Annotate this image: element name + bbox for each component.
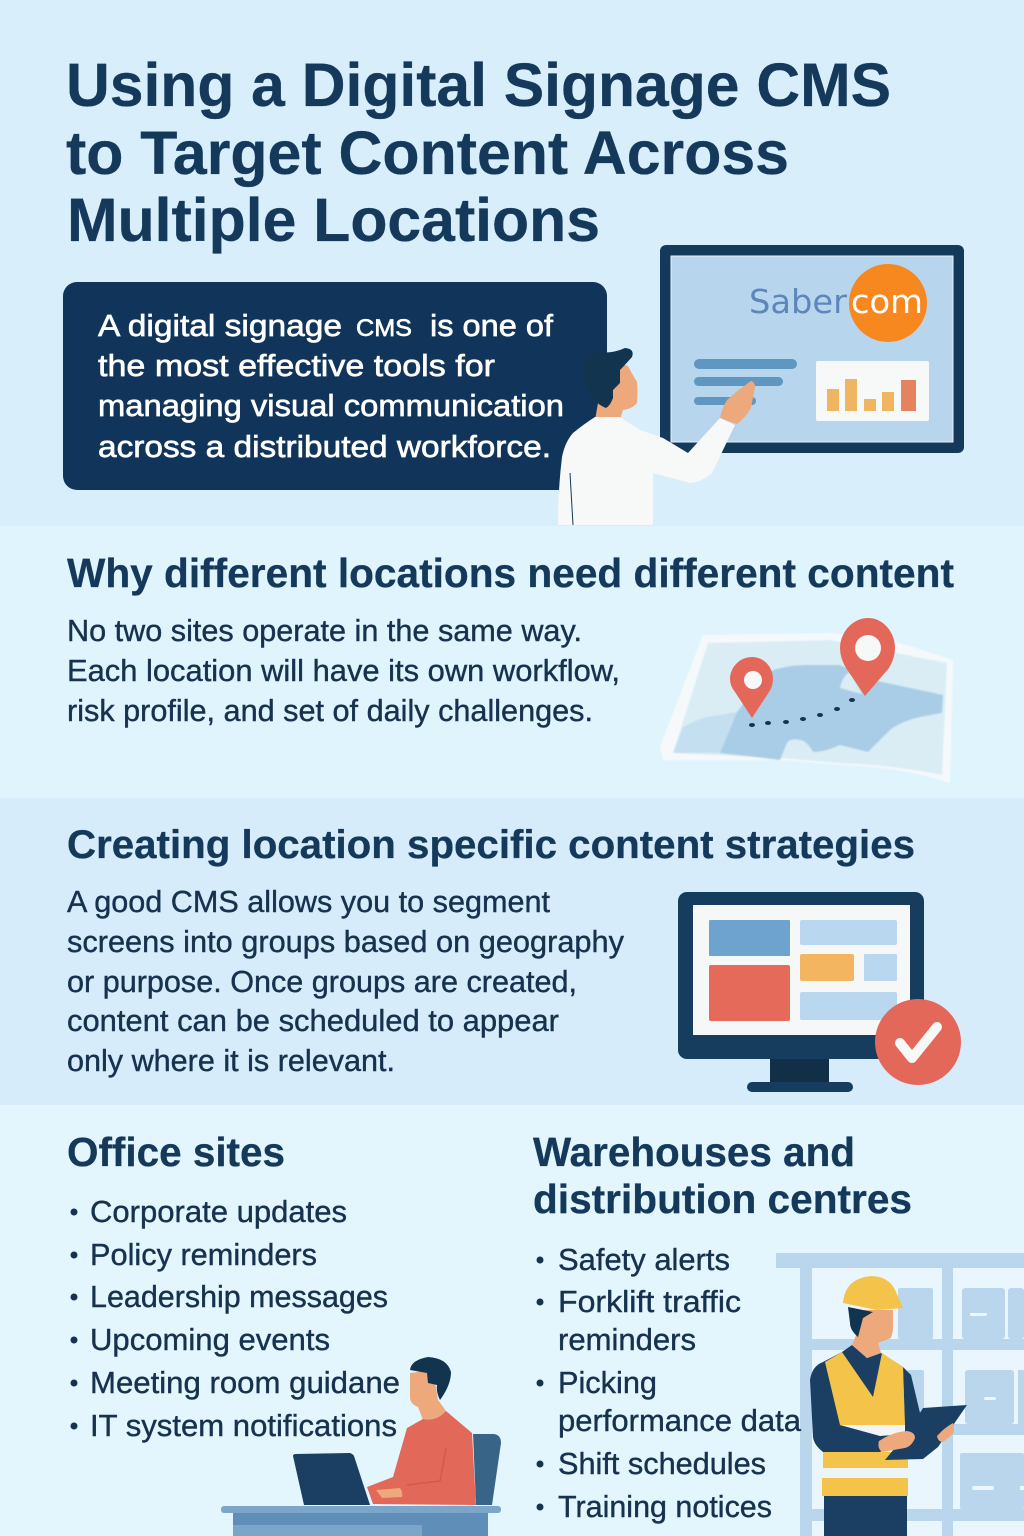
list: office sites: Leadership messages [90,1279,388,1314]
list: warehouses: reminders [558,1322,696,1357]
list: warehouses: Training notices [558,1489,772,1524]
list: office sites: Corporate updates [90,1194,347,1229]
list: warehouses: Picking [558,1365,657,1400]
text block: location specific strategies [67,884,624,1078]
icon: wall screen with logo: com [851,282,923,321]
heading: warehouses: Warehouses and [533,1129,855,1175]
panel: intro callout [63,282,607,490]
panel: intro callout: the most effective tools for [98,348,495,383]
panel: intro callout: A digital signage [98,308,342,343]
illustration: warehouse shelving [776,1253,1024,1536]
heading: warehouses: distribution centres [533,1176,912,1222]
list: warehouses: Shift schedules [558,1446,766,1481]
text block: why different locations: No two sites operate in the same way. [67,613,582,648]
icon: map with location pins [660,618,953,783]
list: office sites: Meeting room guidane [90,1365,400,1400]
list: warehouses: Safety alerts [558,1242,730,1277]
text block: why different locations [67,613,620,728]
text block: location specific strategies: only where it is relevant. [67,1043,395,1078]
text block: location specific strategies: content can be scheduled to appear [67,1003,559,1038]
text block: location specific strategies: screens into groups based on geography [67,924,624,959]
heading: warehouses [533,1129,912,1222]
icon: presenter pointing at screen [558,348,755,525]
panel: intro callout: across a distributed workforce. [98,429,551,464]
icon: wall screen with logo [660,245,964,453]
list: warehouses: Forklift traffic [558,1284,741,1319]
icon: wall screen with logo: Saber [749,282,847,321]
title: to Target Content Across [66,119,789,187]
list: office sites: Upcoming events [90,1322,330,1357]
text block: why different locations: risk profile, and set of daily challenges. [67,693,593,728]
title: Multiple Locations [67,186,600,254]
text block: location specific strategies: or purpose. Once groups are created, [67,964,577,999]
list: warehouses [536,1242,802,1524]
heading: office sites: Office sites [67,1129,285,1175]
title [66,51,891,254]
icon: monitor with content layout and check badge [678,892,961,1092]
text block: location specific strategies: A good CMS allows you to segment [67,884,550,919]
title: Using a Digital Signage CMS [66,51,891,119]
panel: intro callout: managing visual communication [98,388,564,423]
text block: why different locations: Each location will have its own workflow, [67,653,620,688]
panel: intro callout: is one of [430,308,553,343]
list: warehouses: performance data [558,1403,802,1438]
icon: warehouse worker with clipboard [810,1276,967,1536]
panel: intro callout: CMS [356,315,412,342]
heading: location specific strategies: Creating location specific content strategies [67,823,915,867]
list: office sites [70,1194,400,1443]
list: office sites: Policy reminders [90,1237,317,1272]
heading: why different locations: Why different locations need different content [67,550,954,596]
icon: office worker at desk [221,1357,501,1536]
list: office sites: IT system notifications [90,1408,397,1443]
